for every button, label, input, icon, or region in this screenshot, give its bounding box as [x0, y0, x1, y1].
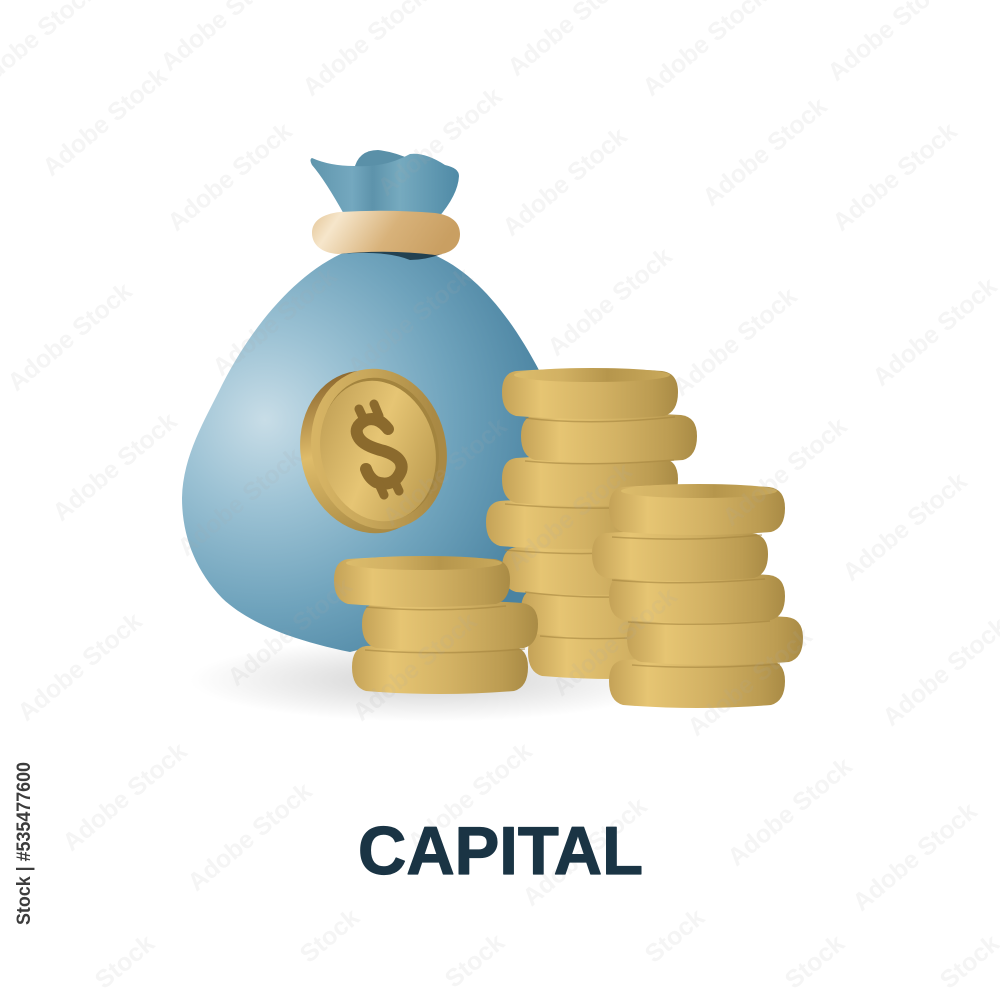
watermark: Adobe Stock	[827, 117, 962, 237]
watermark: Adobe Stock	[547, 582, 682, 702]
watermark: Adobe Stock	[502, 457, 637, 577]
watermark: Adobe Stock	[47, 407, 182, 527]
money bag	[182, 150, 540, 652]
top coin surface	[621, 484, 777, 498]
watermark: Stock	[295, 903, 365, 968]
watermark: Adobe Stock	[717, 412, 852, 532]
watermark: Adobe Stock	[497, 122, 632, 242]
watermark: Adobe Stock	[667, 282, 802, 402]
top coin	[502, 368, 678, 419]
coin stack: back	[486, 368, 704, 679]
watermark: Adobe Stock	[402, 737, 537, 857]
coin inner ring	[306, 365, 454, 533]
watermark: Stock	[780, 929, 850, 994]
watermark: Adobe Stock	[372, 82, 507, 202]
watermark: Adobe Stock	[2, 277, 137, 397]
watermark: Adobe Stock	[37, 62, 172, 182]
watermark: Stock	[640, 903, 710, 968]
watermark: Adobe Stock	[57, 737, 192, 857]
coin stack: front left	[334, 556, 538, 694]
top coin surface	[514, 368, 670, 382]
watermark: Stock	[90, 929, 160, 994]
watermark: Adobe Stock	[377, 412, 512, 532]
coin face rim	[294, 354, 464, 544]
watermark: Adobe Stock	[172, 442, 307, 562]
watermark: Adobe Stock	[342, 262, 477, 382]
stock id side label: Stock | #535477600	[14, 762, 35, 925]
watermark: Adobe Stock	[682, 622, 817, 742]
bag body	[182, 249, 540, 652]
watermark: Adobe Stock	[347, 607, 482, 727]
watermark: Adobe Stock	[837, 467, 972, 587]
watermark: Adobe Stock	[12, 607, 147, 727]
watermark: Adobe Stock	[542, 242, 677, 362]
watermark: Adobe Stock	[867, 272, 1000, 392]
watermark: Stock	[440, 928, 510, 993]
coin edge	[283, 356, 455, 548]
watermark: Adobe Stock	[222, 572, 357, 692]
top coin	[334, 556, 510, 607]
watermark: Adobe Stock	[207, 262, 342, 382]
coin stack: right	[592, 484, 803, 708]
top coin surface	[346, 556, 502, 570]
coin inner face	[306, 368, 450, 534]
dollar coin	[283, 354, 464, 548]
top coin	[609, 484, 785, 535]
watermark: Adobe Stock	[722, 752, 857, 872]
ground shadow	[190, 638, 670, 722]
watermark: Adobe Stock	[517, 792, 652, 912]
bag neck fabric	[310, 154, 459, 218]
watermark: Adobe Stock	[162, 117, 297, 237]
title: CAPITAL	[358, 813, 643, 889]
tie ring	[312, 211, 460, 255]
icon: dollar sign	[357, 404, 402, 495]
watermark: Adobe Stock	[182, 777, 317, 897]
watermark: Adobe Stock	[847, 797, 982, 917]
bag back fold	[354, 150, 412, 190]
watermark: Adobe Stock	[697, 92, 832, 212]
shadow under tie	[340, 250, 442, 260]
